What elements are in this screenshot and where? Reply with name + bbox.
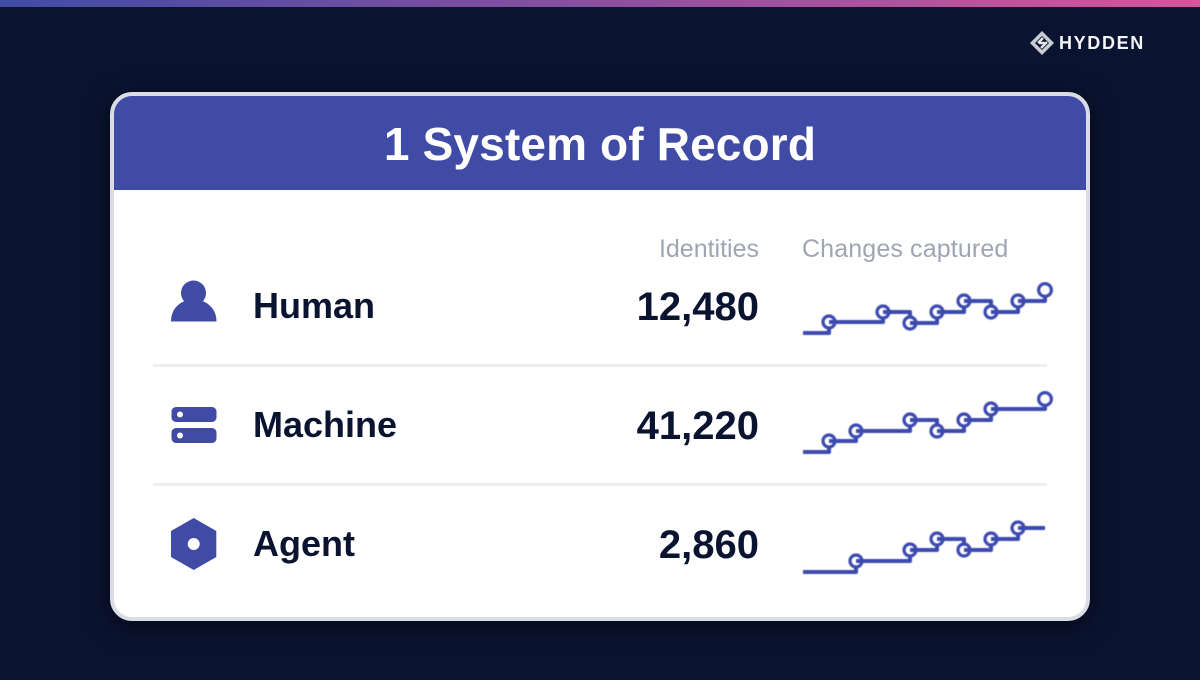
icon: agent xyxy=(171,518,216,570)
label: Machine: Machine xyxy=(253,404,397,445)
icon: human xyxy=(171,280,216,322)
heading: 1 System of Record: 1 System of Record xyxy=(384,118,816,170)
value: human identities: 12,480 xyxy=(637,285,759,329)
label: Human: Human xyxy=(253,285,375,326)
divider xyxy=(153,483,1047,486)
column header: Identities: Identities xyxy=(659,235,759,263)
logo: Hydden: HYDDEN xyxy=(1059,33,1145,53)
value: agent identities: 2,860 xyxy=(659,523,759,567)
heading: 1 System of Record xyxy=(114,96,1086,190)
icon: machine xyxy=(172,407,216,443)
logo: Hydden xyxy=(1030,31,1145,55)
value: machine identities: 41,220 xyxy=(637,404,759,448)
column header: Changes captured: Changes captured xyxy=(802,235,1008,263)
label: Agent: Agent xyxy=(253,523,355,564)
divider xyxy=(153,364,1047,367)
panel: system of record card xyxy=(110,92,1090,621)
top gradient bar xyxy=(0,0,1200,7)
